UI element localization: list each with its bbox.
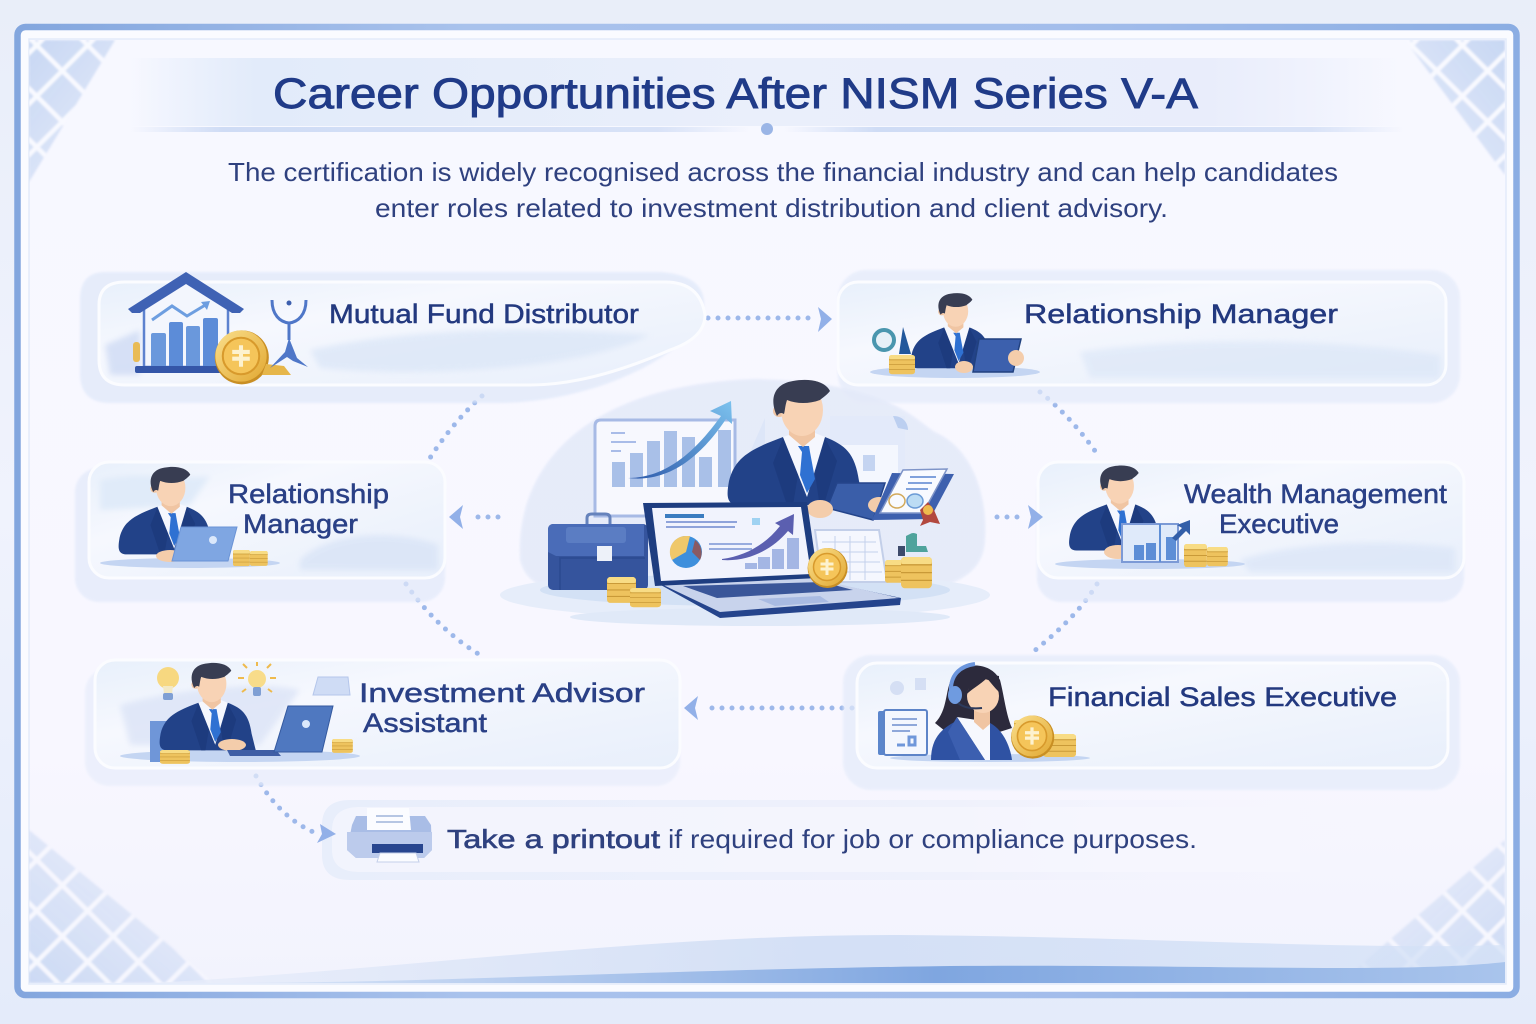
chart board xyxy=(595,401,765,516)
coin stack right xyxy=(885,533,932,588)
icon: coins xyxy=(889,355,915,374)
central illustration xyxy=(500,379,990,626)
connectors xyxy=(256,318,1100,834)
icon: light bulb right xyxy=(238,662,276,696)
label xyxy=(1184,479,1448,539)
calendar xyxy=(815,530,887,582)
icon: house with bar chart xyxy=(128,272,244,373)
report book xyxy=(872,469,954,526)
corner lattice top left xyxy=(29,40,115,182)
laptop xyxy=(643,502,901,618)
card: Relationship Manager top xyxy=(838,270,1460,403)
icon: person with tablet xyxy=(911,293,1024,373)
label: Investment Advisor xyxy=(359,678,645,708)
label xyxy=(228,479,389,539)
background document xyxy=(830,416,908,510)
label: Mutual Fund Distributor xyxy=(329,299,639,329)
icon: person with laptop xyxy=(119,467,237,562)
icon: light bulb left xyxy=(157,667,179,700)
corner lattice top right xyxy=(1405,40,1505,175)
ground shadow xyxy=(500,571,990,626)
person xyxy=(728,380,865,505)
corner lattice bottom left xyxy=(29,830,215,983)
shadow xyxy=(870,366,1040,378)
coin stack left xyxy=(607,577,661,607)
backdrop blob xyxy=(520,379,985,592)
label: Assistant xyxy=(363,708,488,738)
tablet and hands xyxy=(807,483,890,520)
icon: woman with headset xyxy=(931,664,1012,760)
bottom wave xyxy=(150,935,1505,983)
label: Manager xyxy=(243,509,358,539)
title band xyxy=(130,58,1400,126)
icon: scale emblem xyxy=(270,300,308,368)
icon: printer xyxy=(347,808,432,862)
card: Wealth Management Executive xyxy=(1037,462,1464,602)
icon: folder xyxy=(313,677,350,695)
icon: faint desk items xyxy=(890,678,926,695)
icon: globe and plant xyxy=(874,327,911,354)
card: Investment Advisor Assistant xyxy=(85,660,680,786)
arrowheads xyxy=(317,307,1043,843)
intro text: The certification is widely recognised across the financial industry and can help candidates xyxy=(228,157,1338,187)
icon: coins xyxy=(233,550,268,566)
printout note xyxy=(322,800,1380,880)
note text: if required for job or compliance purposes. xyxy=(668,824,1197,854)
card: Mutual Fund Distributor xyxy=(80,272,705,403)
icon: person with chart xyxy=(1069,465,1190,562)
title: Career Opportunities After NISM Series V-A xyxy=(273,70,1198,118)
briefcase xyxy=(548,514,648,590)
label: Financial Sales Executive xyxy=(1048,682,1397,712)
icon: person at laptop xyxy=(150,663,333,762)
card: Relationship Manager left xyxy=(75,462,445,602)
icon: coins xyxy=(160,739,353,764)
corner lattice bottom right xyxy=(1383,841,1505,964)
note text: Take a printout xyxy=(447,824,661,854)
label: Wealth Management xyxy=(1184,479,1448,509)
intro text: enter roles related to investment distribution and client advisory. xyxy=(375,193,1168,223)
icon: coin and stack xyxy=(1011,715,1076,759)
label: Executive xyxy=(1219,509,1339,539)
icon: gold coin xyxy=(215,330,269,384)
card: Financial Sales Executive xyxy=(843,655,1460,790)
icon: coins spill xyxy=(262,364,291,375)
title divider xyxy=(130,123,1404,135)
label xyxy=(359,678,645,738)
icon: coins xyxy=(1184,544,1228,567)
intro text xyxy=(228,157,1338,223)
label: Relationship xyxy=(228,479,389,509)
label: Relationship Manager xyxy=(1024,299,1338,329)
gold coin xyxy=(808,548,848,588)
icon: document xyxy=(878,710,927,755)
